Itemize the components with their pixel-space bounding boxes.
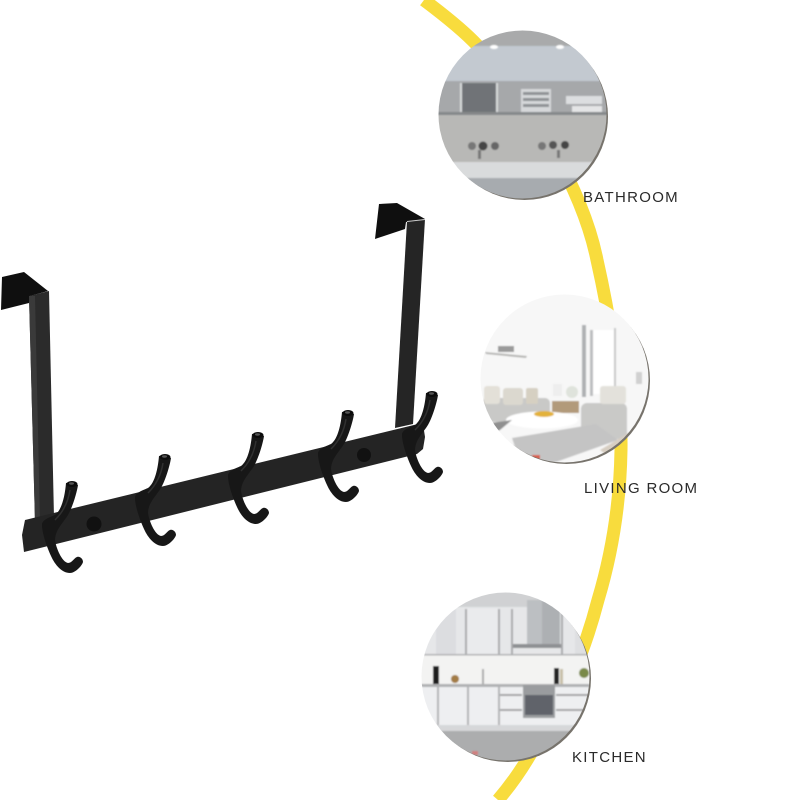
right door bracket: [375, 203, 425, 428]
screw left: [86, 516, 102, 532]
hook 1: [42, 481, 83, 573]
label: kitchen: KITCHEN: [572, 749, 647, 766]
photo: living room: [482, 302, 650, 464]
screw right: [357, 448, 371, 462]
label: living room: LIVING ROOM: [584, 480, 698, 497]
hook rack product: [1, 203, 443, 573]
photo: kitchen: [422, 592, 591, 762]
hook 2: [135, 454, 176, 546]
hook 4: [318, 410, 359, 502]
yellow curved line: [424, 0, 621, 800]
hook 3: [228, 432, 269, 524]
left door bracket: [1, 272, 54, 522]
photo: bathroom: [438, 30, 608, 200]
hook 5: [402, 391, 443, 483]
label: bathroom: BATHROOM: [583, 189, 679, 206]
mounting bar: [22, 424, 425, 552]
